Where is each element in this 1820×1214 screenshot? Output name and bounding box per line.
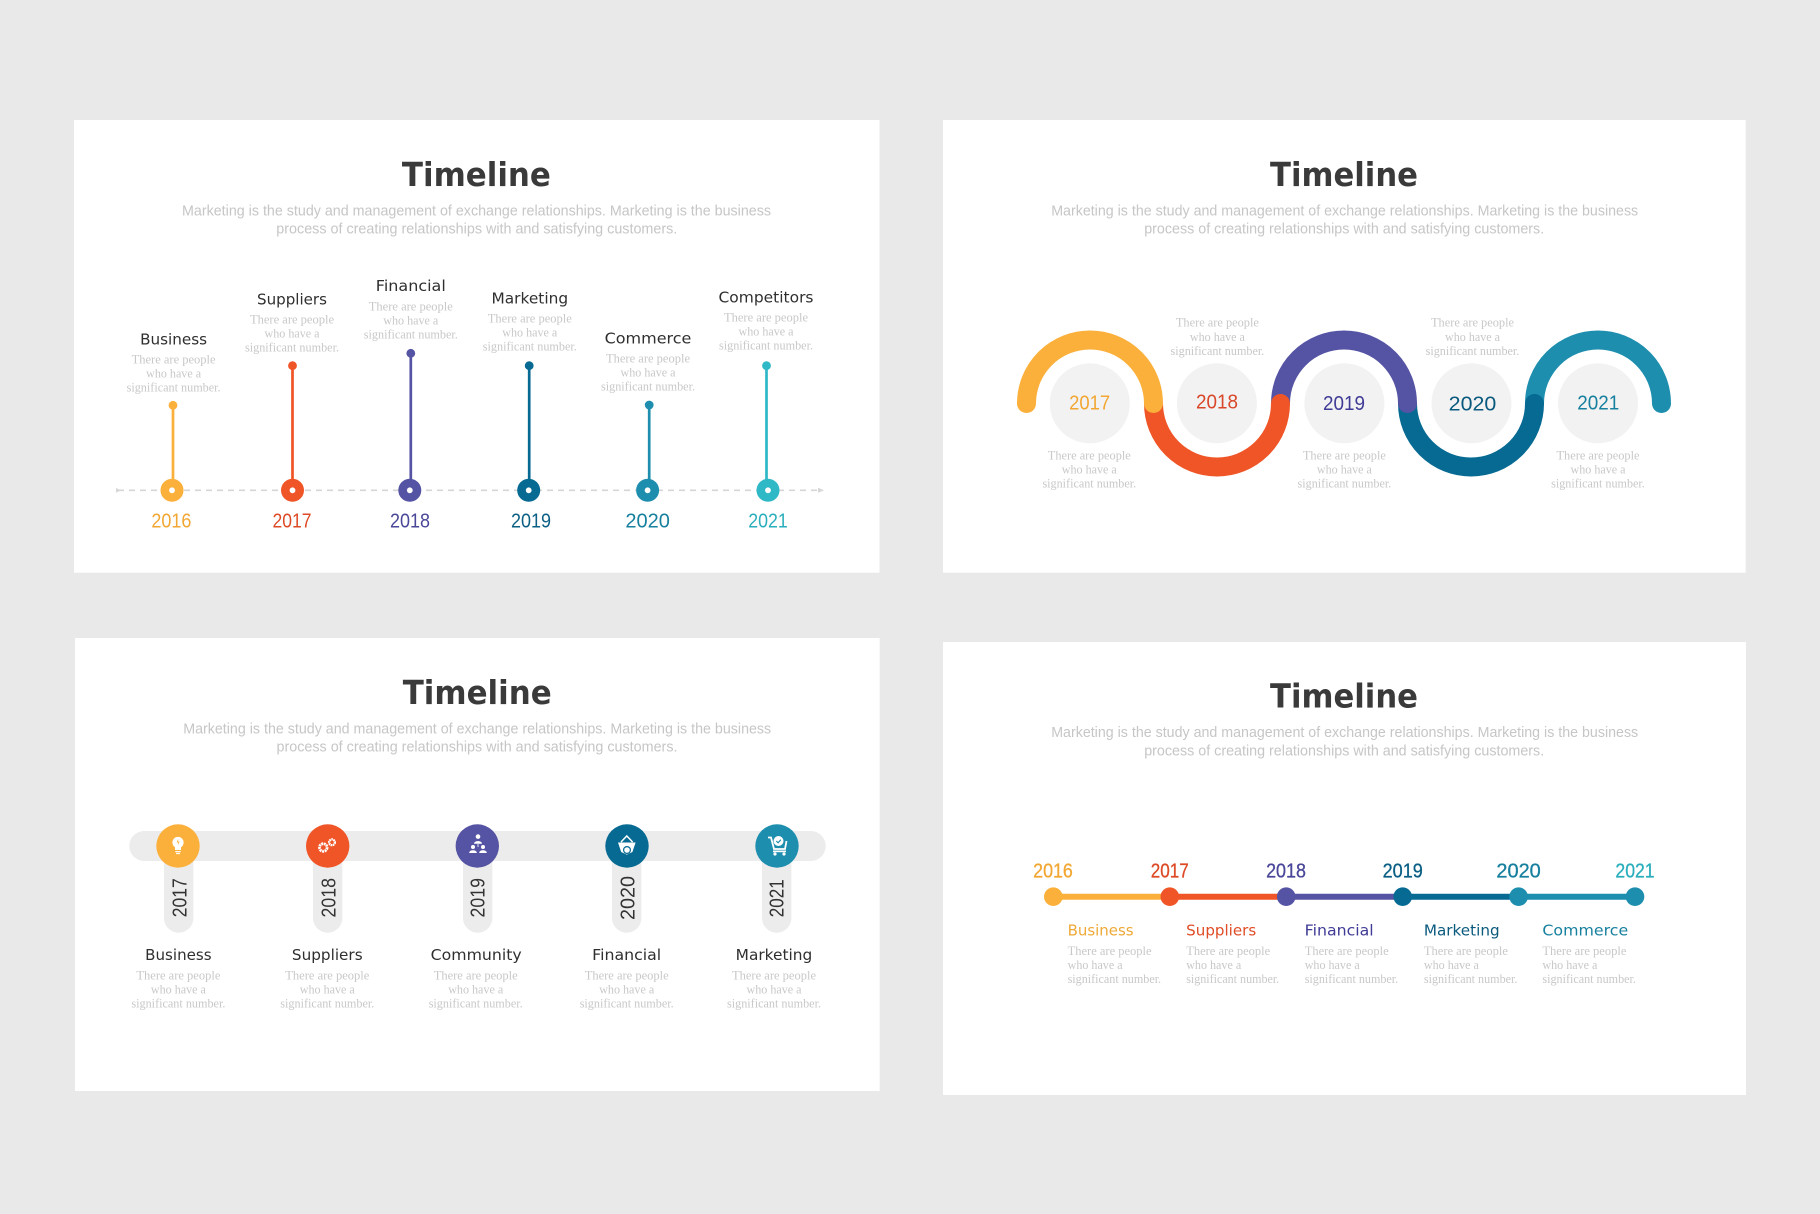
item: Marketing: Marketing [736,946,812,964]
milestone: Competitors 2021 [718,289,814,532]
item: Marketing: who have a [1424,957,1479,972]
item: Financial: who have a [599,982,654,996]
milestone: Suppliers 2017: who have a [264,326,320,340]
item: Financial: significant number. [580,996,674,1010]
item: Community: Community [431,946,522,964]
milestone: Suppliers 2017: There are people [250,311,334,326]
item: Community: significant number. [429,996,523,1010]
item: Suppliers: who have a [1186,957,1241,972]
icon: gears [306,824,349,868]
item: Financial: There are people [585,967,669,982]
caption: 2021: There are people [1556,447,1640,462]
subtitle [182,202,771,238]
item: Marketing: There are people [1424,943,1508,958]
milestone: Financial 2018 [364,277,458,532]
year labels: 2017 [1151,860,1189,882]
panel: segmented line timeline [943,642,1746,1095]
item: Financial [580,946,674,1010]
item: Community [429,946,523,1010]
year labels [1033,860,1655,882]
milestone: Competitors 2021: There are people [724,309,808,324]
subtitle: process of creating relationships with and satisfying customers. [1144,220,1544,238]
milestone: Business 2016: There are people [132,351,216,366]
icon: basket [605,824,649,868]
subtitle [1051,724,1638,759]
year labels: 2016 [1033,860,1073,882]
caption: 2017: significant number. [1042,476,1136,490]
item: Marketing [1424,922,1517,986]
caption: 2020 [1426,315,1519,358]
title: Timeline [403,673,552,712]
item: Community: who have a [448,982,503,996]
rotated year labels: 2021 [766,879,788,917]
caption: 2021 [1551,447,1645,490]
item: Business: who have a [1068,957,1123,972]
milestone: Competitors 2021: Competitors [718,289,814,307]
caption: 2019: significant number. [1298,476,1391,490]
caption: 2018 [1171,315,1264,358]
year labels: 2019 [1383,860,1423,882]
milestone: Commerce 2020: 2020 [625,510,670,532]
caption: 2020: significant number. [1426,343,1519,358]
item: Commerce [1542,922,1636,986]
rotated year labels: 2019 [468,878,490,918]
subtitle: process of creating relationships with and satisfying customers. [1144,742,1544,759]
caption: 2018: There are people [1176,315,1259,330]
milestone: Suppliers 2017: 2017 [272,510,312,532]
item: Financial [1305,922,1398,986]
item: Financial: Financial [1305,922,1374,940]
subtitle: Marketing is the study and management of exchange relationships. Marketing is the business [182,202,771,220]
icon: light bulb [156,824,200,868]
subtitle: Marketing is the study and management of exchange relationships. Marketing is the business [183,720,771,737]
milestone: Commerce 2020: who have a [620,364,676,380]
item: Suppliers: Suppliers [1186,922,1256,940]
year labels: 2020 [1496,860,1541,882]
item: Marketing: significant number. [1424,971,1517,986]
milestone: Marketing 2019: significant number. [483,338,577,354]
year discs [1050,363,1638,443]
title: Timeline [402,155,551,194]
milestone: Commerce 2020: There are people [606,350,690,365]
item: Commerce: Commerce [1542,922,1628,940]
milestone: Commerce 2020: Commerce [605,330,691,348]
caption: 2020: There are people [1431,315,1514,330]
dashed axis arrow [116,488,824,493]
milestone: Business 2016 [127,330,221,532]
item: Financial: who have a [1305,957,1360,972]
item: Community: There are people [434,967,518,982]
caption: 2019: There are people [1303,447,1386,462]
milestone: Marketing 2019: Marketing [492,290,568,308]
title: Timeline [1270,677,1418,716]
item: Commerce: significant number. [1542,971,1636,986]
milestone: Commerce 2020: significant number. [601,378,695,394]
year labels: 2020 [1449,394,1496,416]
caption: 2019: who have a [1317,462,1372,476]
item: Business: There are people [136,967,221,982]
year labels: 2021 [1577,392,1619,414]
item: Suppliers [1186,922,1279,986]
rotated year labels [170,876,788,920]
milestone: Business 2016: 2016 [151,510,191,532]
item: Business: Business [1068,922,1134,940]
caption: 2021: significant number. [1551,476,1645,490]
rotated year labels: 2018 [319,878,341,918]
caption: 2021: who have a [1570,462,1626,476]
item: Marketing [727,946,821,1010]
item: Suppliers: There are people [1186,943,1270,958]
caption: 2018: significant number. [1171,343,1264,358]
milestone: Financial 2018: 2018 [390,510,430,532]
item: Business: There are people [1068,943,1152,958]
panel: lollipop timeline [74,120,880,573]
milestone: Marketing 2019: There are people [488,310,572,325]
milestone: Suppliers 2017: Suppliers [257,290,327,308]
rotated year labels: 2017 [170,878,192,917]
item: Marketing: significant number. [727,996,821,1010]
item: Suppliers: significant number. [1186,971,1279,986]
milestone: Financial 2018: There are people [369,298,453,313]
subtitle: process of creating relationships with and satisfying customers. [276,220,677,238]
caption: 2017: who have a [1062,462,1117,476]
title: Timeline [1270,155,1418,194]
year labels: 2018 [1266,860,1306,882]
milestone dots [1044,887,1644,906]
subtitle [1051,202,1638,238]
milestone: Marketing 2019: 2019 [511,510,551,532]
item: Business [131,946,225,1010]
item: Financial: Financial [592,946,661,964]
item: Suppliers: significant number. [280,996,374,1010]
item: Business: Business [145,946,212,964]
milestone: Financial 2018: Financial [376,277,446,295]
milestone: Marketing 2019 [483,290,577,532]
milestone: Business 2016: significant number. [127,380,221,394]
caption: 2020: who have a [1445,329,1500,344]
caption: 2018: who have a [1190,329,1245,344]
milestone: Competitors 2021: who have a [738,324,794,338]
caption: 2017 [1042,447,1136,490]
year labels: 2018 [1196,392,1238,414]
icon: hierarchy [456,824,499,868]
subtitle [183,720,771,756]
item: Suppliers: There are people [285,967,370,982]
year labels: 2021 [1615,860,1655,882]
subtitle: Marketing is the study and management of exchange relationships. Marketing is the business [1051,724,1638,741]
caption: 2017: There are people [1048,447,1131,462]
item: Financial: significant number. [1305,971,1398,986]
panel: icon bar timeline [75,638,880,1091]
milestone: Commerce 2020 [601,330,695,532]
year labels: 2017 [1069,392,1110,414]
caption: 2019 [1298,447,1391,490]
year labels: 2019 [1323,393,1365,415]
milestone: Business 2016: who have a [146,366,201,380]
item: Financial: There are people [1305,943,1389,958]
milestone: Suppliers 2017 [245,290,339,532]
item: Business [1068,922,1161,986]
item: Marketing: Marketing [1424,922,1500,940]
milestone: Business 2016: Business [140,330,207,348]
item: Commerce: There are people [1542,943,1627,958]
item: Business: significant number. [131,996,225,1010]
item: Business: who have a [151,982,206,996]
item: Marketing: There are people [732,967,816,982]
icon: shopping cart [755,824,799,868]
milestone: Competitors 2021: significant number. [719,338,813,352]
year labels [1069,392,1619,416]
panel: wave timeline [943,120,1746,573]
item: Suppliers: who have a [300,982,355,996]
milestone: Competitors 2021: 2021 [748,510,788,532]
item: Marketing: who have a [746,982,802,996]
segmented line [1053,894,1635,900]
milestone: Suppliers 2017: significant number. [245,340,339,354]
year pills [164,840,791,933]
milestone: Financial 2018: who have a [383,312,439,328]
rotated year labels: 2020 [617,876,639,920]
item: Business: significant number. [1068,971,1161,986]
horizontal grey bar [129,831,826,861]
subtitle: process of creating relationships with and satisfying customers. [276,739,678,756]
subtitle: Marketing is the study and management of exchange relationships. Marketing is the business [1051,202,1638,220]
wave ribbon [1026,340,1662,467]
item: Commerce: who have a [1542,957,1598,972]
milestone: Marketing 2019: who have a [502,324,558,340]
item: Suppliers: Suppliers [292,946,363,964]
item: Suppliers [280,946,374,1010]
milestone: Financial 2018: significant number. [364,326,458,342]
